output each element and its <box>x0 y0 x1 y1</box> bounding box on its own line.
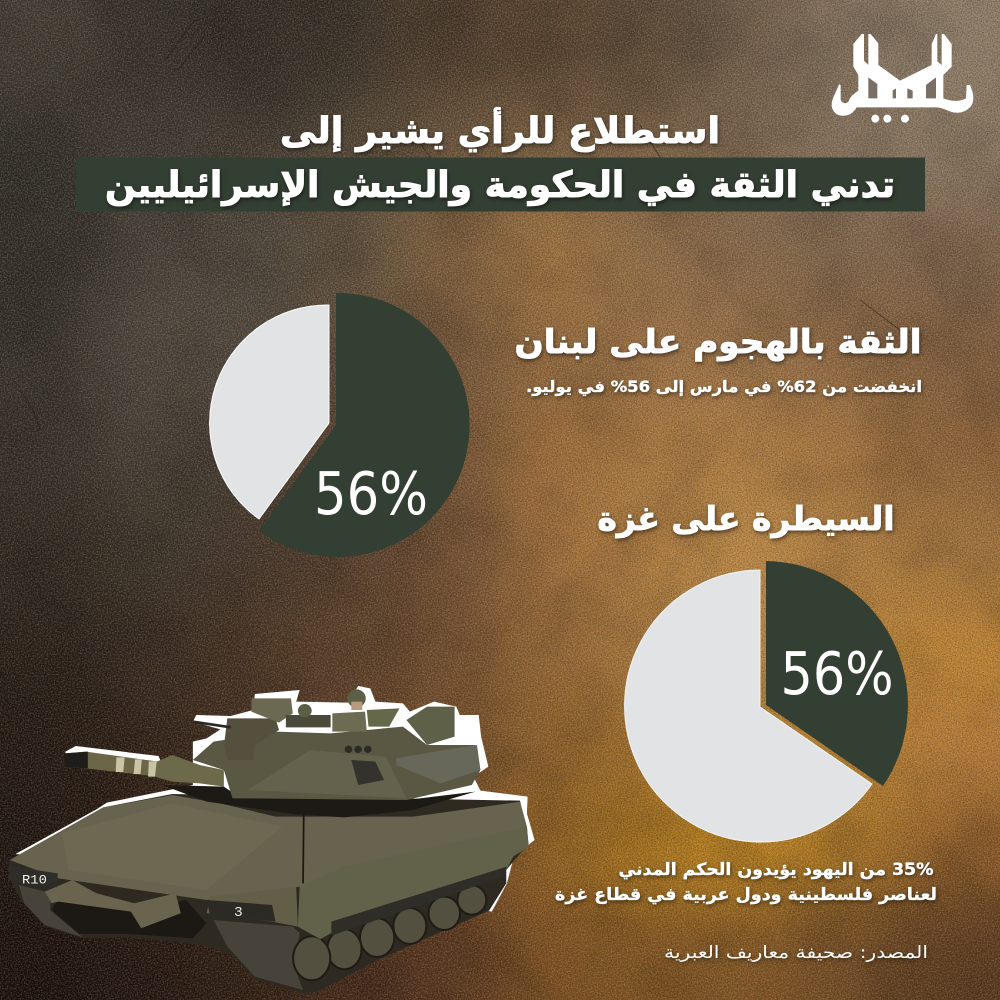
tank mantlet <box>155 755 224 787</box>
tank turret underside <box>162 785 475 817</box>
tank hull deck <box>10 795 529 900</box>
logo: Al Bayan <box>832 34 973 123</box>
source note: المصدر: صحيفة معاريف العبرية <box>664 943 928 963</box>
body text: Gaza civil rule: 35% من اليهود يؤيدون الحكم المدني <box>618 860 934 880</box>
tank front plate right <box>207 887 298 927</box>
tank plate number: R10 <box>22 873 47 888</box>
tank rear turret box <box>406 707 455 745</box>
tank smoke launchers <box>345 746 372 753</box>
section heading: control of Gaza: السيطرة على غزة <box>598 499 894 539</box>
title line 1: استطلاع للرأي يشير إلى <box>280 107 720 152</box>
tank left plate <box>9 866 58 887</box>
tank crew and hatch <box>286 689 400 732</box>
pie value label: 56% <box>780 639 894 708</box>
pie slice: 56 percent <box>259 293 470 557</box>
tank machine gun mount <box>224 718 279 760</box>
tank side number: 3 <box>234 905 243 921</box>
illustration: tank <box>9 686 535 993</box>
tank turret <box>193 727 480 800</box>
tank silhouette backing <box>9 794 529 993</box>
tank front tracks <box>19 885 303 990</box>
pie slice: remainder <box>210 305 329 519</box>
section heading: trust in Lebanon attack: الثقة بالهجوم على لبنان <box>514 322 922 362</box>
pie value label: 56% <box>314 459 428 528</box>
title banner: تدني الثقة في الحكومة والجيش الإسرائيليين <box>105 165 895 206</box>
tank side skirt <box>298 827 529 939</box>
tank gun barrel <box>65 752 158 777</box>
body text: Gaza civil rule <box>555 860 937 905</box>
tank hatch cover <box>351 760 384 785</box>
tank antenna <box>301 810 306 883</box>
tank front dark recess <box>52 897 207 938</box>
body text: Gaza civil rule: لعناصر فلسطينية ودول عربية في قطاع غزة <box>555 885 937 905</box>
pie slice: remainder <box>625 570 872 842</box>
pie slice: highlighted value <box>766 561 908 786</box>
pie chart: Gaza control <box>625 561 908 842</box>
tank road wheels <box>293 885 486 980</box>
tank cut-out halo <box>15 686 535 912</box>
section text: Lebanon drop: انخفضت من 62% في مارس إلى 56% في يوليو. <box>526 377 922 397</box>
tank front bumper <box>45 880 181 928</box>
pie chart: Lebanon attack trust <box>210 293 470 557</box>
